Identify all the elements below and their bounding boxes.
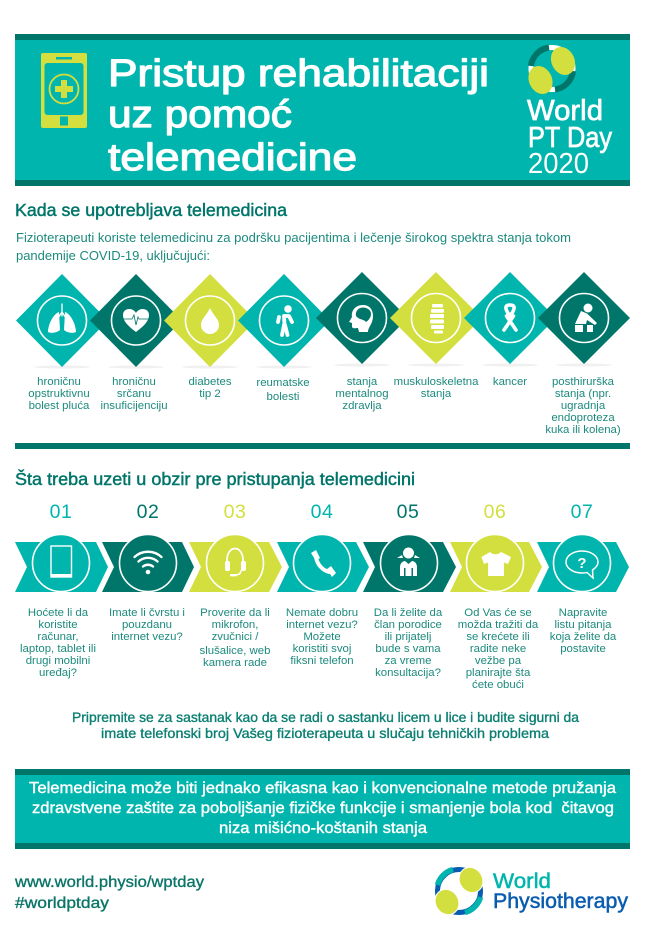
step 07: question bubble: ? [577, 555, 587, 572]
label: post-surgical: endoproteza [551, 412, 615, 424]
chevron process row [15, 534, 629, 592]
footer links [14, 874, 204, 912]
text: step 03: mikrofon, [212, 619, 258, 631]
text: step 04: koristiti svoj [293, 643, 351, 655]
World PT Day 2020 logo [524, 43, 612, 180]
text: step 03: Proverite da li [200, 607, 270, 619]
label: musculoskeletal: muskuloskeletna [394, 376, 478, 388]
label: chronic obstructive lung disease: hroničnu [37, 376, 81, 388]
label: rheumatic diseases: reumatske [256, 377, 310, 389]
step numbers: 02 [137, 501, 159, 523]
icon: smartphone with medical cross [41, 53, 87, 128]
step numbers: 03 [224, 501, 246, 523]
text: step 05: član porodice [374, 619, 442, 631]
label: mental health: mentalnog [335, 388, 389, 400]
step numbers [50, 501, 593, 523]
text: step 07: postavite [560, 643, 606, 655]
label: chronic obstructive lung disease: bolest pluća [29, 400, 90, 412]
intro paragraph [16, 230, 571, 263]
footer links: #worldptday [15, 895, 109, 912]
preparation note: Pripremite se za sastanak kao da se radi o sastanku licem u lice i budite sigurni da [72, 709, 579, 725]
conclusion banner: Telemedicina može biti jednako efikasna kao i konvencionalne metode pružanja [29, 780, 616, 797]
step 01: tablet [15, 534, 108, 592]
diamond: chronic heart failure [90, 274, 182, 367]
text: step 01: računar, [37, 631, 79, 643]
condition labels [28, 376, 621, 436]
diamond: musculoskeletal conditions [390, 272, 482, 364]
World PT Day 2020 logo: PT Day [528, 122, 612, 154]
title: uz pomoć [108, 94, 292, 136]
conditions diamonds row [16, 272, 630, 368]
label: post-surgical: kuka ili kolena) [545, 424, 621, 436]
text: step 06: ćete obući [472, 679, 524, 691]
label: post-surgical: stanja (npr. [555, 388, 611, 400]
label: chronic heart failure: hroničnu [112, 376, 156, 388]
text: step 04: Nemate dobru [286, 607, 358, 619]
label: mental health: zdravlja [342, 400, 382, 412]
text: step 01: uređaj? [39, 667, 77, 679]
text: step 06: možda tražiti da [458, 619, 539, 631]
World PT Day 2020 logo: World [527, 95, 603, 127]
text: step 04: internet vezu? [286, 619, 358, 631]
header banner [15, 34, 630, 186]
text: step 06: planirajte šta [466, 667, 531, 679]
conclusion banner: niza mišićno-koštanih stanja [219, 820, 427, 837]
text: step 05: za vreme [385, 655, 431, 667]
World Physiotherapy logo: Physiotherapy [493, 890, 629, 913]
text: step 07: Napravite [559, 607, 607, 619]
title: telemedicine [108, 137, 357, 179]
text: step 07: listu pitanja [554, 619, 612, 631]
step descriptions [20, 607, 617, 691]
text: step 02: Imate li čvrstu i [109, 607, 185, 619]
heading: what to consider: Šta treba uzeti u obzir pre pristupanja telemedicini [15, 468, 415, 489]
text: step 05: ili prijatelj [385, 631, 431, 643]
label: chronic heart failure: insuficijenciju [100, 400, 168, 412]
step numbers: 01 [50, 501, 72, 523]
text: step 04: Možete [303, 631, 341, 643]
label: diabetes: tip 2 [199, 388, 221, 400]
label: musculoskeletal: stanja [421, 388, 452, 400]
step 07: question bubble [537, 534, 629, 592]
text: step 05: konsultacija? [375, 667, 441, 679]
diamond: cancer [464, 272, 556, 364]
label: diabetes: diabetes [188, 376, 232, 388]
text: step 01: koristite [38, 619, 78, 631]
text: step 06: Od Vas će se [464, 607, 532, 619]
diamond: mental health conditions [316, 272, 408, 364]
title: Pristup rehabilitaciji [108, 53, 489, 95]
conclusion banner [15, 769, 630, 849]
diamond: post-surgical conditions [538, 272, 630, 364]
text: step 01: laptop, tablet ili [20, 643, 96, 655]
label: post-surgical: posthirurška [552, 376, 614, 388]
text: step 05: Da li želite da [374, 607, 442, 619]
heading: when telemedicine is used: Kada se upotrebljava telemedicina [15, 200, 287, 220]
text: step 02: pouzdanu [122, 619, 172, 631]
shadows under diamonds [34, 364, 612, 368]
step numbers: 04 [311, 501, 333, 523]
step numbers: 06 [484, 501, 506, 523]
step numbers: 07 [571, 501, 593, 523]
step numbers: 05 [397, 501, 419, 523]
step 02: wifi [102, 534, 194, 592]
label: cancer: kancer [493, 376, 527, 388]
text: step 06: se krećete ili [466, 631, 530, 643]
diamond: chronic obstructive lung disease [16, 274, 108, 367]
conclusion banner: zdravstvene zaštite za poboljšanje fizičke funkcije i smanjenje bola kod čitavog [32, 800, 614, 817]
step 04: telephone [277, 534, 369, 592]
text: step 03: slušalice, web [200, 645, 270, 657]
intro paragraph: pandemije COVID-19, uključujući: [16, 248, 210, 263]
step 06: t-shirt [450, 534, 542, 592]
diamond: type 2 diabetes [164, 274, 256, 367]
World Physiotherapy logo: World [493, 870, 551, 893]
text: step 01: Hoćete li da [28, 607, 88, 619]
text: step 07: koja želite da [550, 631, 617, 643]
text: step 01: drugi mobilni [26, 655, 90, 667]
intro paragraph: Fizioterapeuti koriste telemedicinu za podršku pacijentima i lečenje širokog spektra stanja tokom [16, 230, 571, 245]
text: step 04: fiksni telefon [290, 655, 354, 667]
label: chronic heart failure: srčanu [117, 388, 151, 400]
text: step 02: internet vezu? [111, 631, 183, 643]
footer links: www.world.physio/wptday [14, 874, 204, 891]
World Physiotherapy logo [431, 863, 629, 919]
text: step 05: bude s vama [375, 643, 441, 655]
preparation note [72, 709, 579, 741]
label: mental health: stanja [347, 376, 377, 388]
label: rheumatic diseases: bolesti [267, 391, 299, 403]
step 05: family member [363, 534, 456, 592]
preparation note: imate telefonski broj Vašeg fizioterapeuta u slučaju tehničkih problema [101, 725, 549, 741]
step 03: headset [189, 534, 282, 592]
World PT Day 2020 logo: 2020 [528, 148, 589, 180]
text: step 06: vežbe pa [475, 655, 522, 667]
label: post-surgical: ugradnja [561, 400, 606, 412]
title [108, 53, 489, 179]
text: step 03: kamera rade [203, 657, 267, 669]
label: chronic obstructive lung disease: opstruktivnu [28, 388, 90, 400]
text: step 03: zvučnici / [212, 631, 259, 643]
diamond: rheumatic diseases [238, 274, 330, 367]
text: step 06: radite neke [470, 643, 526, 655]
